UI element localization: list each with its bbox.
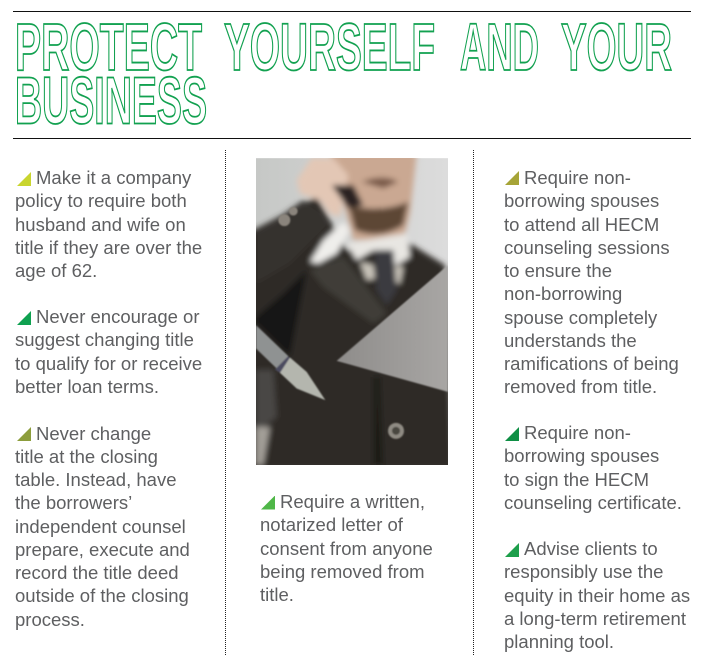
text: written consent: being removed from xyxy=(260,561,425,582)
text: counseling certificate: to sign the HECM xyxy=(504,468,649,490)
icon: green triangle xyxy=(505,543,519,557)
text: never change: Never change xyxy=(36,422,151,444)
text: written consent: title. xyxy=(260,584,294,605)
text: written consent: notarized letter of xyxy=(260,514,403,535)
text: counseling sessions: to attend all HECM xyxy=(504,214,659,234)
icon: dark green triangle xyxy=(505,427,519,441)
text: counseling sessions: borrowing spouses xyxy=(504,190,659,211)
panel: right column xyxy=(504,167,690,652)
text: never change: independent counsel xyxy=(15,516,186,536)
text: company policy: husband and wife on xyxy=(15,214,186,234)
text: company policy xyxy=(15,167,202,281)
photo: businessman on phone xyxy=(256,158,448,465)
icon: yellow triangle xyxy=(17,172,31,186)
text: counseling certificate: borrowing spouses xyxy=(504,445,659,466)
text: counseling sessions: understands the xyxy=(504,330,637,351)
text: never change: outside of the closing xyxy=(15,585,189,606)
title: YOURSELF xyxy=(224,10,435,85)
title: AND xyxy=(460,10,539,85)
text: counseling sessions: spouse completely xyxy=(504,306,657,328)
text: counseling sessions: ramifications of being xyxy=(504,353,679,374)
text: company policy: policy to require both xyxy=(15,190,187,211)
text: company policy: Make it a company xyxy=(36,167,191,188)
text: counseling certificate: Require non- xyxy=(524,422,631,443)
text: counseling sessions: removed from title. xyxy=(504,376,657,397)
title: BUSINESS xyxy=(15,64,207,138)
text: never encourage: to qualify for or receive xyxy=(15,352,202,374)
icon: olive triangle xyxy=(505,171,519,185)
icon: olive triangle xyxy=(17,427,31,441)
text: counseling sessions xyxy=(504,167,679,397)
text: counseling certificate xyxy=(504,422,682,513)
text: never change: process. xyxy=(15,608,85,630)
text: counseling sessions: counseling sessions xyxy=(504,237,670,258)
text: never change: table. Instead, have xyxy=(15,469,176,490)
panel: middle text xyxy=(260,491,433,605)
text: advise clients: equity in their home as xyxy=(504,584,690,606)
icon: light green triangle xyxy=(261,496,275,510)
text: counseling certificate: counseling certificate. xyxy=(504,492,682,513)
text: written consent: Require a written, xyxy=(280,491,425,512)
text: counseling sessions: Require non- xyxy=(524,167,631,188)
text: company policy: title if they are over the xyxy=(15,237,202,258)
text: never change: prepare, execute and xyxy=(15,539,190,560)
text: never change xyxy=(15,422,190,630)
text: never encourage xyxy=(15,306,202,397)
text: never change: record the title deed xyxy=(15,562,179,583)
text: advise clients xyxy=(504,538,690,652)
icon: green triangle xyxy=(17,311,31,325)
text: never change: the borrowers’ xyxy=(15,492,132,513)
text: written consent xyxy=(260,491,433,605)
title xyxy=(15,10,672,138)
text: counseling sessions: to ensure the xyxy=(504,260,612,281)
text: never encourage: suggest changing title xyxy=(15,329,194,350)
text: never change: title at the closing xyxy=(15,446,158,467)
panel: left column xyxy=(15,167,202,630)
text: advise clients: Advise clients to xyxy=(524,538,658,559)
text: advise clients: responsibly use the xyxy=(504,561,663,582)
text: never encourage: Never encourage or xyxy=(36,306,200,327)
text: company policy: age of 62. xyxy=(15,260,97,281)
text: advise clients: planning tool. xyxy=(504,631,614,652)
text: written consent: consent from anyone xyxy=(260,538,433,558)
text: counseling sessions: non-borrowing xyxy=(504,283,622,304)
title: PROTECT xyxy=(15,10,202,85)
text: never encourage: better loan terms. xyxy=(15,376,159,397)
text: advise clients: a long-term retirement xyxy=(504,608,686,629)
